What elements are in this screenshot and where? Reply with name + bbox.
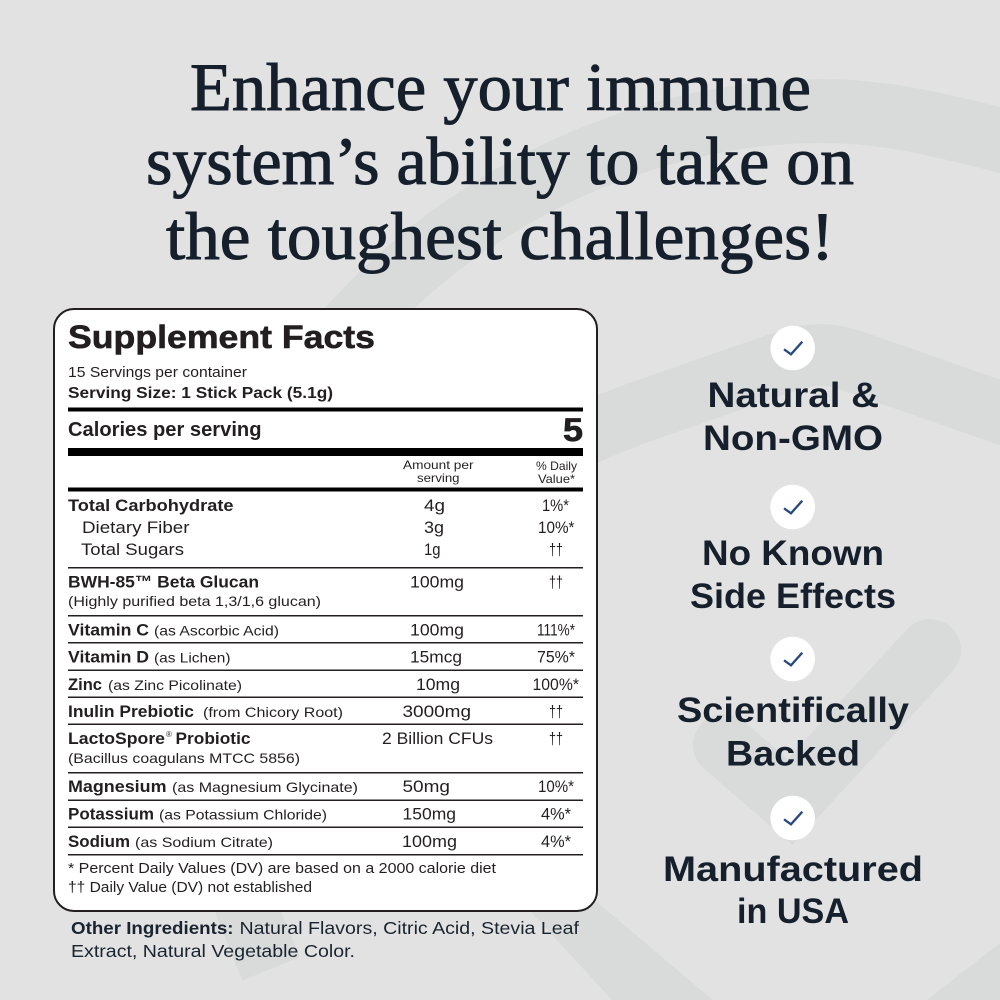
servings: Serving Size: 1 Stick Pack (5.1g) (68, 385, 333, 402)
row: dietary fiber: 10%* (538, 518, 575, 537)
row: lactospore probiotic: (Bacillus coagulans MTCC 5856) (68, 750, 300, 766)
calories row (68, 412, 583, 448)
row: beta glucan: (Highly purified beta 1,3/1,6 glucan) (68, 593, 321, 609)
row: vitamin d: 15mcg (410, 648, 462, 666)
icon: check badge (770, 637, 815, 681)
row: total sugars: †† (549, 540, 563, 559)
row: beta glucan: BWH-85™ Beta Glucan (68, 572, 259, 592)
row: sodium: Sodium (68, 832, 130, 851)
row: dietary fiber: Dietary Fiber (82, 518, 190, 537)
column headers: % Daily (536, 459, 577, 473)
label (703, 375, 883, 458)
other ingredients: Other Ingredients: (71, 918, 234, 938)
heading: supplement facts: Supplement Facts (68, 319, 375, 355)
row: total sugars: 1g (424, 540, 440, 559)
row: inulin prebiotic: †† (549, 702, 563, 721)
benefit: natural and non-gmo (703, 326, 883, 458)
row: lactospore probiotic: †† (549, 729, 563, 748)
label: Non-GMO (703, 418, 883, 458)
footnotes: * Percent Daily Values (DV) are based on a 2000 calorie diet (68, 861, 496, 877)
label: Scientifically (677, 690, 909, 730)
row: magnesium: Magnesium (68, 777, 166, 796)
label: No Known (702, 533, 884, 573)
row: vitamin c: 111%* (537, 620, 575, 640)
icon: check badge (770, 796, 815, 840)
icon: check badge (770, 485, 815, 529)
row: vitamin c (68, 620, 575, 640)
row: zinc: Zinc (68, 675, 102, 694)
row: beta glucan: †† (549, 572, 563, 592)
column headers: serving (417, 471, 460, 485)
label: Side Effects (690, 576, 896, 616)
row: inulin prebiotic: 3000mg (402, 702, 471, 721)
benefit: scientifically backed (677, 637, 909, 774)
title: Enhance your immune (190, 49, 811, 125)
label: Backed (726, 734, 860, 774)
row: potassium: (as Potassium Chloride) (159, 806, 327, 822)
column headers: Value* (538, 472, 575, 486)
row: sodium: 4%* (541, 832, 571, 851)
row: sodium: 100mg (402, 832, 457, 851)
footnotes (68, 861, 496, 896)
row: vitamin d: 75%* (537, 648, 575, 666)
row: lactospore probiotic: ® (166, 730, 172, 739)
benefit: manufactured in usa (663, 796, 923, 931)
title (146, 49, 854, 274)
column headers (403, 458, 577, 486)
other ingredients: Natural Flavors, Citric Acid, Stevia Leaf (240, 918, 579, 938)
calories row: 5 (563, 412, 583, 448)
other ingredients: Extract, Natural Vegetable Color. (71, 941, 355, 961)
row: lactospore probiotic (68, 729, 563, 766)
row: total carbohydrate: 4g (424, 496, 445, 515)
row: potassium: Potassium (68, 804, 154, 824)
background watermark: shield and check (236, 111, 1000, 1000)
label (690, 533, 896, 616)
label (677, 690, 909, 774)
row: vitamin c: (as Ascorbic Acid) (154, 622, 279, 638)
card background (54, 309, 597, 911)
column headers: Amount per (403, 458, 474, 472)
row: inulin prebiotic (68, 702, 563, 721)
row: sodium: (as Sodium Citrate) (135, 834, 273, 850)
label (663, 849, 923, 931)
row: dietary fiber: 3g (424, 518, 444, 537)
row: potassium: 4%* (541, 804, 571, 824)
row: vitamin c: Vitamin C (68, 620, 149, 640)
label: Manufactured (663, 849, 923, 889)
row: total carbohydrate (68, 496, 569, 515)
calories row: Calories per serving (68, 419, 262, 441)
row: vitamin c: 100mg (410, 620, 464, 640)
row: magnesium (68, 777, 574, 796)
benefit: no known side effects (690, 485, 896, 616)
other ingredients (71, 918, 579, 961)
row: sodium (68, 832, 571, 851)
title: the toughest challenges! (166, 198, 834, 274)
row: beta glucan (68, 572, 563, 609)
row: potassium (68, 804, 571, 824)
title: system’s ability to take on (146, 123, 854, 199)
row: inulin prebiotic: Inulin Prebiotic (68, 702, 194, 721)
row: total sugars: Total Sugars (81, 540, 184, 559)
panel: supplement facts (54, 309, 597, 911)
row: lactospore probiotic: 2 Billion CFUs (382, 729, 493, 748)
row: dietary fiber (82, 518, 575, 537)
row: vitamin d: Vitamin D (68, 648, 149, 666)
row: zinc (68, 675, 579, 694)
row: magnesium: 50mg (402, 777, 450, 796)
row: zinc: (as Zinc Picolinate) (108, 677, 242, 693)
label: Natural & (708, 375, 879, 415)
footnotes: †† Daily Value (DV) not established (68, 880, 312, 896)
row: total sugars (81, 540, 563, 559)
row: lactospore probiotic: Probiotic (176, 729, 250, 748)
row: magnesium: (as Magnesium Glycinate) (172, 779, 358, 795)
row: total carbohydrate: Total Carbohydrate (68, 496, 234, 515)
row: total carbohydrate: 1%* (542, 496, 569, 515)
row: vitamin d: (as Lichen) (154, 650, 230, 666)
row: zinc: 100%* (532, 675, 579, 694)
servings: 15 Servings per container (68, 365, 247, 381)
row: zinc: 10mg (416, 675, 460, 694)
servings (68, 365, 333, 402)
row: lactospore probiotic: LactoSpore (68, 729, 165, 748)
label: in USA (737, 891, 849, 931)
row: inulin prebiotic: (from Chicory Root) (203, 704, 343, 720)
row: potassium: 150mg (402, 804, 456, 824)
row: beta glucan: 100mg (410, 572, 464, 592)
row: vitamin d (68, 648, 575, 666)
row: magnesium: 10%* (538, 777, 574, 796)
icon: check badge (770, 326, 815, 370)
